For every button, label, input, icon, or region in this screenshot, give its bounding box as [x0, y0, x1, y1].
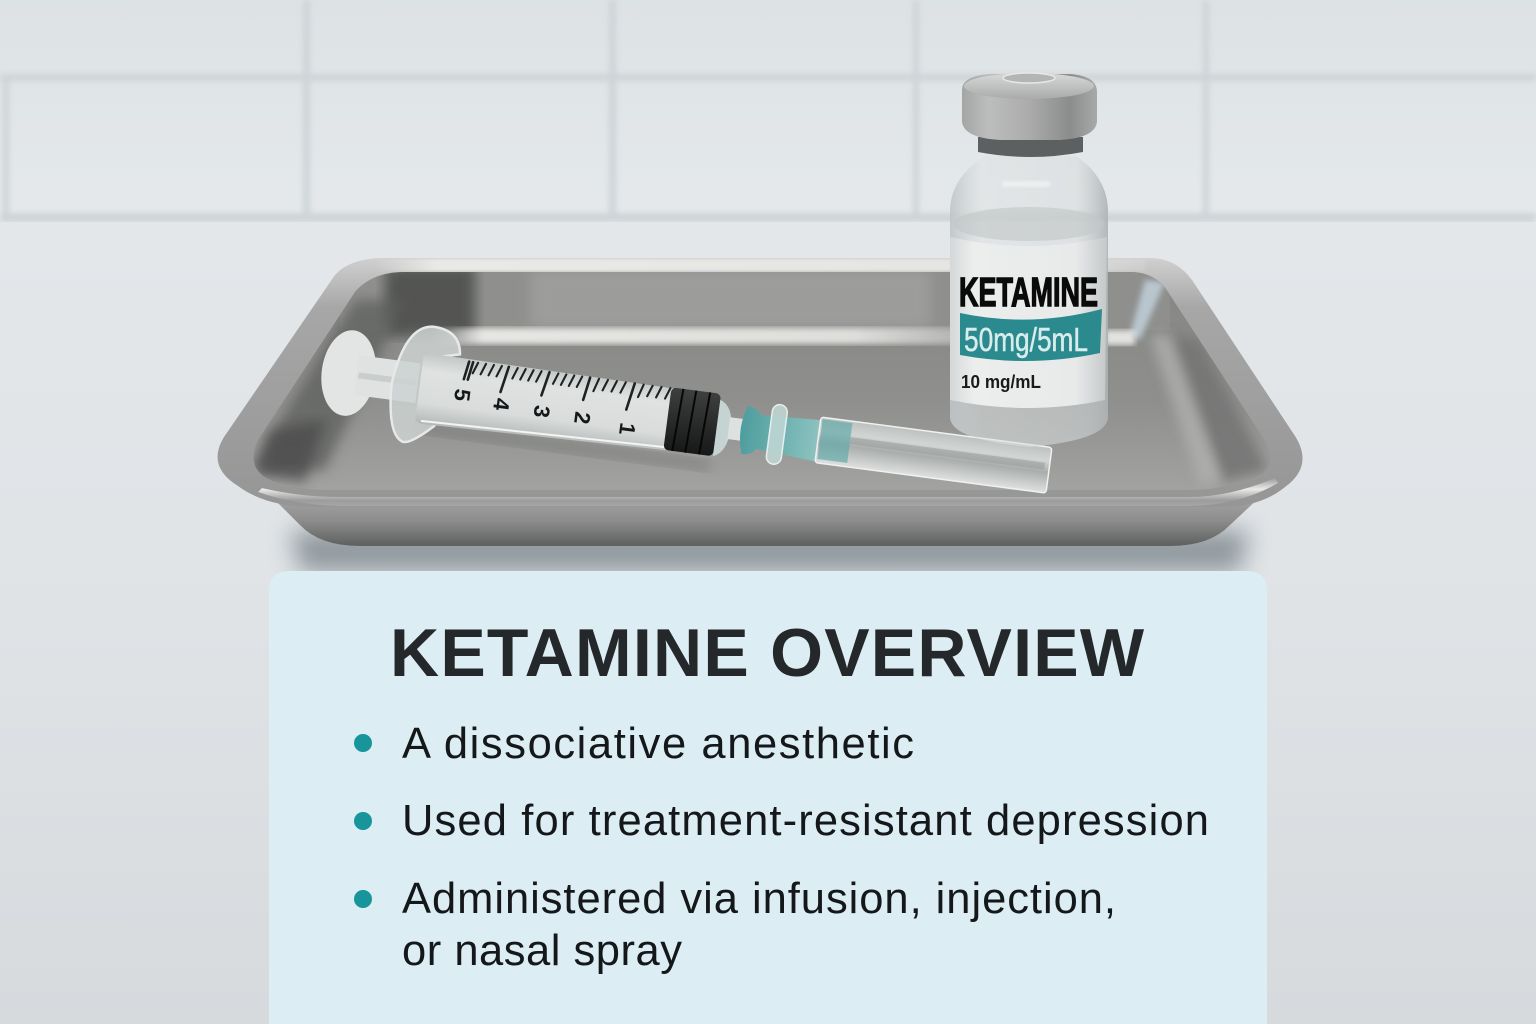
tray well floor	[254, 272, 1270, 490]
bullet 3: or nasal spray	[402, 927, 682, 975]
background: tiled wall	[0, 0, 1536, 222]
background: counter surface	[0, 222, 1536, 1024]
graduation numbers: 1	[614, 421, 640, 437]
shield inner line	[850, 437, 1045, 470]
finger flange	[384, 322, 463, 448]
tray shadow on counter	[290, 530, 1250, 572]
tray front wall	[270, 495, 1262, 546]
metal tray	[218, 258, 1303, 546]
bullet 2: Used for treatment-resistant depression	[402, 797, 1209, 845]
luer connector	[727, 417, 750, 442]
tray front highlight	[258, 478, 1278, 506]
rim top highlight	[375, 259, 1145, 271]
glass highlight	[1002, 181, 1050, 187]
barrel tip	[713, 400, 734, 458]
dose band	[960, 309, 1102, 361]
plunger rod	[354, 355, 421, 403]
barrel lower edge	[421, 415, 672, 454]
hub collar	[765, 404, 788, 465]
bullet 1: A dissociative anesthetic	[402, 720, 914, 768]
graduation numbers: 4	[488, 397, 515, 413]
cap centre ring	[1003, 73, 1055, 83]
graduation numbers: 5	[449, 387, 475, 403]
crimp cap side	[962, 74, 1097, 140]
graduation numbers: 2	[569, 410, 595, 426]
rubber stopper	[663, 387, 721, 456]
needle shield	[815, 417, 1052, 493]
plunger disc	[316, 327, 381, 419]
plunger rod highlight	[358, 372, 416, 386]
tray rim	[218, 258, 1303, 507]
bullet 3: Administered via infusion, injection,	[402, 875, 1116, 923]
crimp cap top	[964, 73, 1094, 99]
bullet 3	[354, 875, 1116, 975]
needle hub	[737, 406, 823, 464]
panel background	[269, 571, 1267, 1024]
info panel	[269, 571, 1267, 1024]
vial neck	[978, 137, 1083, 157]
paper label	[950, 237, 1107, 408]
title: KETAMINE OVERVIEW	[390, 615, 1145, 691]
medicine vial	[950, 73, 1108, 447]
syringe shadow	[411, 421, 710, 472]
syringe	[314, 313, 1057, 526]
vial glass body	[950, 156, 1108, 447]
shield teal tint	[817, 419, 852, 463]
concentration text: 10 mg/mL	[961, 372, 1041, 392]
liquid surface	[953, 207, 1105, 241]
tray well shading	[250, 266, 1268, 484]
vial brand name: KETAMINE	[959, 269, 1098, 315]
graduation numbers: 3	[529, 404, 555, 419]
barrel	[415, 353, 680, 457]
dose band text: 50mg/5mL	[964, 321, 1088, 358]
graduation ticks	[463, 361, 670, 415]
graduation numbers	[447, 387, 642, 437]
stopper ribs	[672, 388, 710, 455]
